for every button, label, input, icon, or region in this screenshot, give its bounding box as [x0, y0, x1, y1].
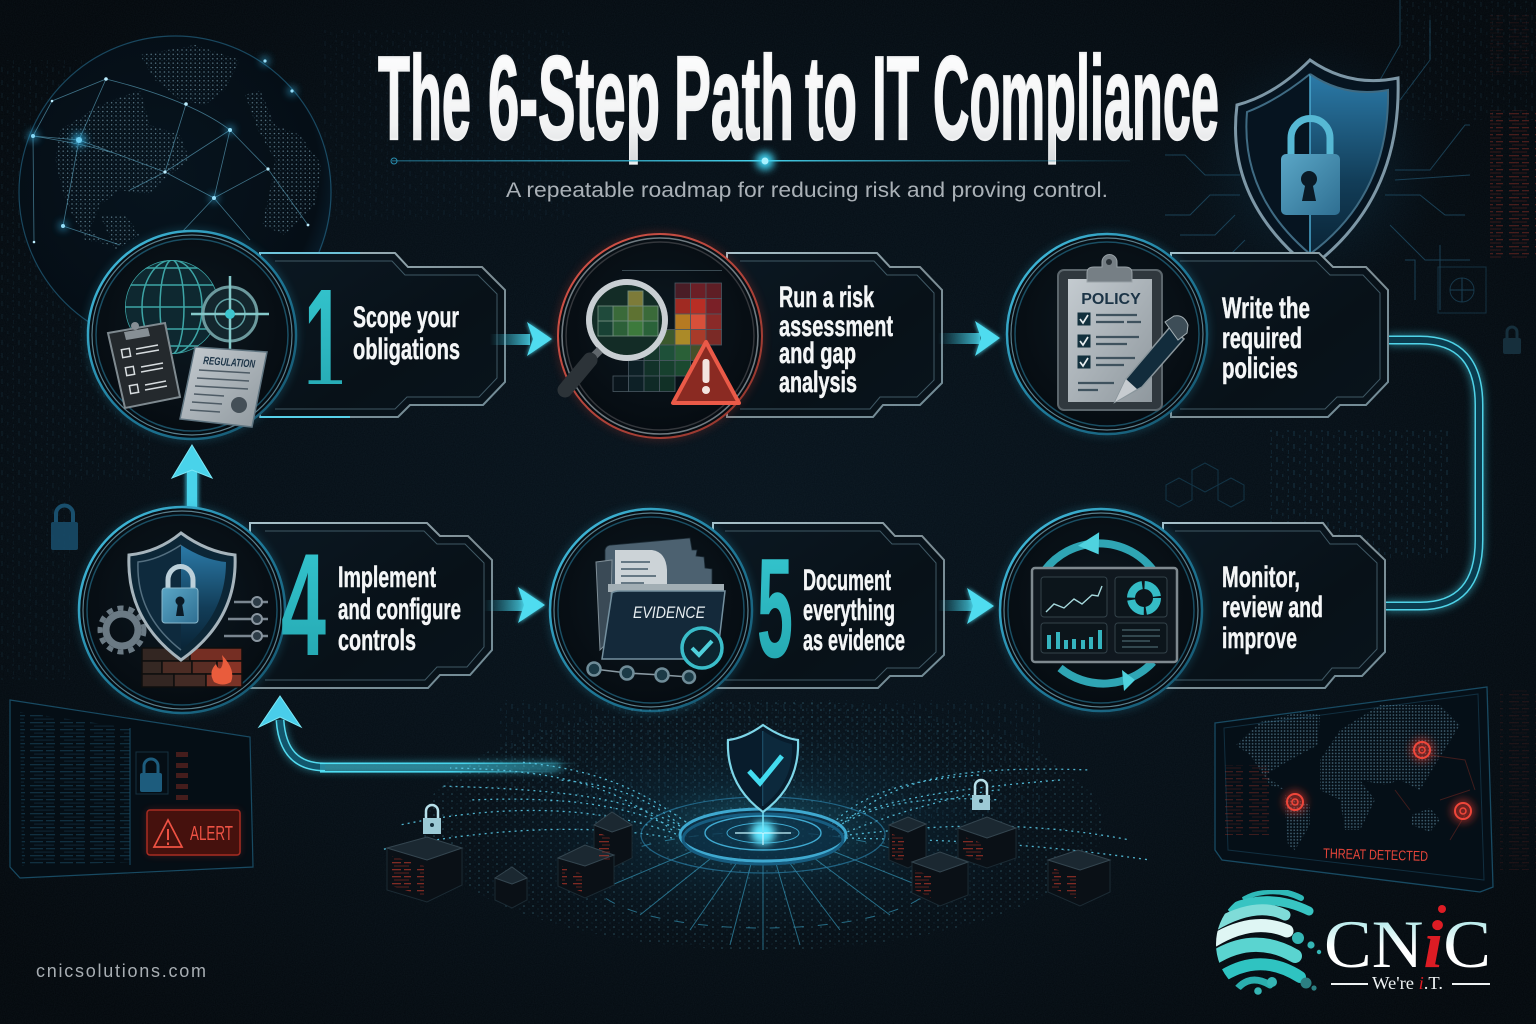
icon: large shield with padlock — [1185, 35, 1445, 295]
icon: globe, target, clipboard and regulation — [85, 228, 299, 442]
step 4 label: controls — [338, 624, 416, 657]
arrow: step 4 up to step 1 — [172, 445, 212, 515]
dim hexagons — [1166, 463, 1244, 507]
arrow: step 2 to 3 — [938, 321, 1000, 356]
panel: step 1: 1 — [304, 257, 344, 429]
logo wordmark: CNiC — [1324, 906, 1491, 982]
icon: evidence folder — [547, 506, 755, 714]
arrow: step 5 to 6 — [938, 588, 994, 624]
step number 4: 4 — [281, 523, 326, 686]
title: Path — [674, 32, 794, 165]
globe network backdrop — [18, 35, 332, 349]
panel: step 4 — [76, 504, 492, 716]
panel: step 1 — [85, 228, 505, 442]
icon: left padlock — [423, 805, 441, 834]
icon: policy clipboard and pen — [1004, 231, 1210, 437]
website url: cnicsolutions.com — [36, 961, 206, 981]
step 2 label: analysis — [779, 366, 857, 399]
subtitle: A repeatable roadmap for reducing risk and proving control. — [506, 178, 1108, 202]
step 3 label: Write the — [1222, 292, 1310, 325]
icon: monitoring dashboard with cycle arrows — [997, 506, 1205, 714]
step 1 label: obligations — [353, 333, 460, 366]
icon: dim padlocks — [51, 327, 1521, 550]
icon: evidence folder: EVIDENCE — [633, 604, 706, 622]
icon: right padlock — [972, 780, 990, 810]
step 4 label: Implement — [338, 561, 436, 594]
step 1 label: Scope your — [353, 301, 459, 334]
title rule — [391, 152, 1130, 170]
step 3 label: required — [1222, 322, 1302, 355]
step 6 label: improve — [1222, 622, 1297, 655]
step 2 card — [727, 253, 942, 417]
logo tagline: We're i.T. — [1372, 973, 1443, 993]
circuit traces around shield — [1165, 0, 1486, 313]
threat map screen — [1215, 687, 1493, 892]
icon: shield, padlock, gear and firewall — [76, 504, 288, 716]
logo: CNIC — [1205, 891, 1491, 1000]
threat label: THREAT DETECTED — [1323, 845, 1428, 864]
panel: step 6 — [997, 506, 1385, 714]
step 3 card — [1171, 253, 1388, 417]
title: IT — [872, 32, 919, 165]
icon: risk heatmap, magnifier and warning — [555, 231, 765, 441]
step 5 label: as evidence — [803, 624, 905, 657]
step 6 label: Monitor, — [1222, 561, 1300, 594]
data streams — [380, 762, 1150, 860]
alert badge — [147, 810, 240, 855]
panel: step 5: 5 — [757, 529, 793, 688]
logo sphere — [1216, 890, 1314, 990]
step 5 label: everything — [803, 594, 895, 627]
arrow: step 4 to 5 — [484, 587, 545, 623]
panel: step 2 — [555, 231, 942, 441]
threat markers — [1283, 738, 1475, 823]
step 5 card — [713, 523, 944, 688]
step 2 label: and gap — [779, 337, 856, 370]
step 5 label: Document — [803, 564, 891, 597]
title: to — [805, 32, 857, 165]
panel: step 5 — [547, 506, 944, 714]
arrow: return loop to step 4 — [259, 696, 580, 773]
data hub with shield — [380, 700, 1150, 950]
step 4 label: and configure — [338, 593, 461, 626]
step 2 label: assessment — [779, 310, 893, 343]
arrow: connector step 3 to step 6 — [1385, 340, 1479, 606]
alert badge: ALERT — [190, 823, 233, 845]
map continents — [1236, 705, 1460, 850]
alert console backdrop — [10, 700, 253, 878]
step 6 label: review and — [1222, 591, 1323, 624]
title: The — [378, 32, 471, 165]
arrow: step 1 to 2 — [490, 322, 552, 356]
server racks — [387, 812, 1110, 908]
icon: globe, target, clipboard and regulation: REGULATION — [203, 355, 256, 371]
step 6 card — [1163, 523, 1385, 688]
icon: policy clipboard and pen: POLICY — [1081, 291, 1141, 308]
step 1 card — [260, 252, 505, 418]
panel: step 3 — [1004, 231, 1388, 437]
step 2 label: Run a risk — [779, 281, 874, 314]
step 4 card — [250, 523, 492, 688]
title: 6-Step — [488, 32, 660, 165]
step 3 label: policies — [1222, 352, 1298, 385]
icon: shield with check — [728, 725, 798, 812]
